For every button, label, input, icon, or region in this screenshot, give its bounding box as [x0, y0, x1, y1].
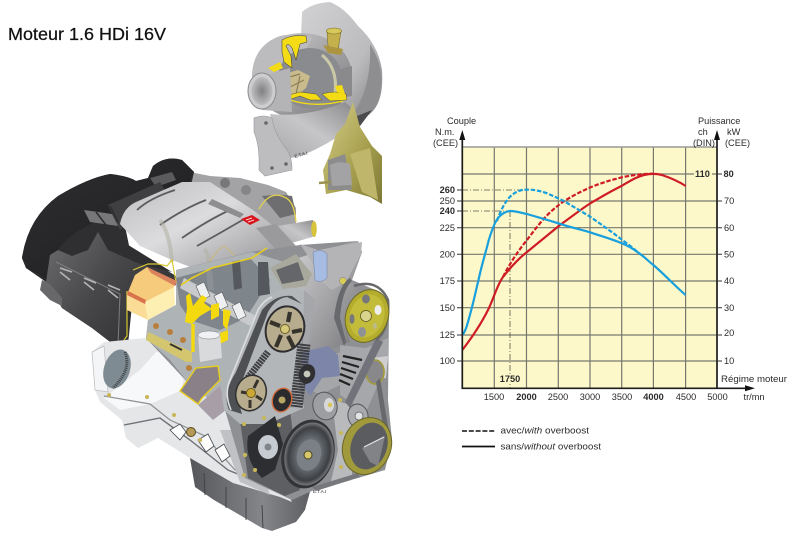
power scale labels: 20: [724, 328, 734, 338]
power scale labels: 70: [724, 196, 734, 206]
small bolts: [109, 395, 341, 475]
camshaft pulley: [259, 300, 311, 358]
alternator pulley: [366, 360, 384, 384]
air conditioning compressor pulley: [335, 411, 399, 481]
torque scale labels: 150: [440, 303, 455, 313]
orange air filter: [128, 267, 177, 302]
side strut: [256, 224, 296, 254]
timing belt: [227, 296, 302, 414]
left axis title: N.m.: [435, 127, 454, 137]
part reference: E.T.A.I: [313, 489, 326, 494]
accessory belts: [334, 278, 352, 346]
engine cover: [120, 182, 284, 270]
power scale labels: 60: [724, 223, 734, 233]
dark silhouette of air intake: [22, 158, 194, 348]
yellow cutaway sections: [282, 36, 307, 68]
turbine wheel: [284, 70, 310, 96]
crank timing pulley: [231, 371, 271, 415]
chain and lower gear: [247, 416, 283, 478]
yellow cutaway outline: [181, 248, 267, 285]
inlet tube: [255, 68, 292, 112]
torque scale labels: 200: [440, 250, 455, 260]
yellow oil and water galleries: [185, 293, 212, 324]
alternator: [340, 338, 388, 412]
legend: avec/with overboost: [500, 426, 589, 436]
compressor housing: [300, 2, 382, 122]
crankshaft pulley: [273, 413, 343, 495]
blue dashed torque curve: [497, 190, 640, 254]
engine speed labels: [484, 374, 787, 402]
red dashed power curve: [503, 174, 653, 277]
flywheel ring: [98, 346, 136, 392]
engine speed labels: 2500: [548, 392, 568, 402]
torque scale labels: 260: [440, 185, 455, 195]
right axis title: (DIN): [693, 138, 715, 148]
engine speed labels: Régime moteur: [721, 374, 787, 384]
yellow and ghost pipes on cover: [160, 220, 208, 270]
torque scale labels: 125: [440, 330, 455, 340]
power scale labels: 40: [724, 276, 734, 286]
engine speed labels: 1750: [500, 374, 520, 384]
axis arrowheads: [459, 130, 755, 391]
piston: [198, 332, 222, 362]
front right housing: [296, 241, 362, 350]
idlers: [309, 389, 341, 423]
power scale labels: 10: [724, 356, 734, 366]
grid: [462, 147, 717, 388]
power scale labels: [694, 169, 734, 366]
left axis title: Couple: [447, 116, 476, 126]
legend: [462, 426, 601, 452]
engine internals: [146, 252, 298, 410]
illustration: engine: [22, 158, 399, 531]
power scale labels: 30: [724, 303, 734, 313]
right axis title: (CEE): [725, 138, 750, 148]
right axis title: ch: [698, 127, 708, 137]
engine speed labels: 2000: [516, 392, 537, 402]
power scale labels: 80: [724, 169, 734, 179]
engine speed labels: 4500: [676, 392, 696, 402]
actuator bracket: [323, 102, 382, 204]
power scale labels: 110: [695, 169, 710, 179]
torque and power chart: [433, 116, 787, 452]
camshaft: [180, 278, 256, 326]
air filter box: [46, 232, 176, 348]
engine speed labels: 3000: [580, 392, 600, 402]
lower machinery: [240, 410, 300, 496]
block ribs: [170, 424, 230, 462]
torque scale labels: 240: [440, 206, 455, 216]
part reference: E.T.A.I: [294, 150, 308, 159]
oil fittings: [327, 30, 341, 50]
torque scale labels: 175: [440, 276, 455, 286]
engine speed labels: tr/mn: [744, 392, 764, 402]
turbine body: [252, 33, 352, 119]
timing cover frame: [222, 288, 312, 424]
outlet pipe: [278, 220, 316, 244]
connecting chamber: [180, 366, 220, 404]
water pump pulley: [338, 283, 396, 349]
engine speed labels: 5000: [707, 392, 728, 402]
blue solid torque curve: [462, 211, 686, 335]
blue actuator: [313, 250, 327, 282]
axes: [462, 136, 748, 388]
dark idler: [296, 362, 318, 386]
dark air hose: [22, 158, 194, 285]
engine speed labels: 4000: [643, 392, 664, 402]
left tick marks: [457, 174, 722, 361]
engine rear silver manifolds: [180, 172, 296, 232]
injectors: [232, 260, 270, 296]
right axis title: Puissance: [698, 116, 740, 126]
reference dash-dot lines: [462, 190, 528, 388]
plot background: [462, 147, 717, 388]
power scale labels: 50: [724, 250, 734, 260]
exhaust manifold and flange: [270, 102, 356, 158]
red solid power curve: [462, 174, 686, 350]
engine speed labels: 1500: [484, 392, 504, 402]
oil pan: [190, 458, 311, 531]
torque scale labels: 100: [440, 356, 455, 366]
illustration: turbocharger: [248, 2, 382, 204]
left axis title: (CEE): [433, 138, 458, 148]
right axis title: kW: [727, 127, 741, 137]
engine center and right underlay: [146, 241, 392, 500]
torque scale labels: [440, 185, 455, 366]
fuel rail: [146, 332, 192, 362]
cylinder block: [92, 320, 292, 502]
engine speed labels: 3500: [612, 392, 632, 402]
red logo badge: [241, 215, 260, 225]
tensioner idler orange: [269, 386, 295, 414]
torque scale labels: 225: [440, 223, 455, 233]
inner wheel section: [278, 48, 342, 108]
torque scale labels: 250: [440, 196, 455, 206]
title: Moteur 1.6 HDi 16V: [8, 24, 166, 44]
legend: sans/without overboost: [500, 442, 601, 452]
